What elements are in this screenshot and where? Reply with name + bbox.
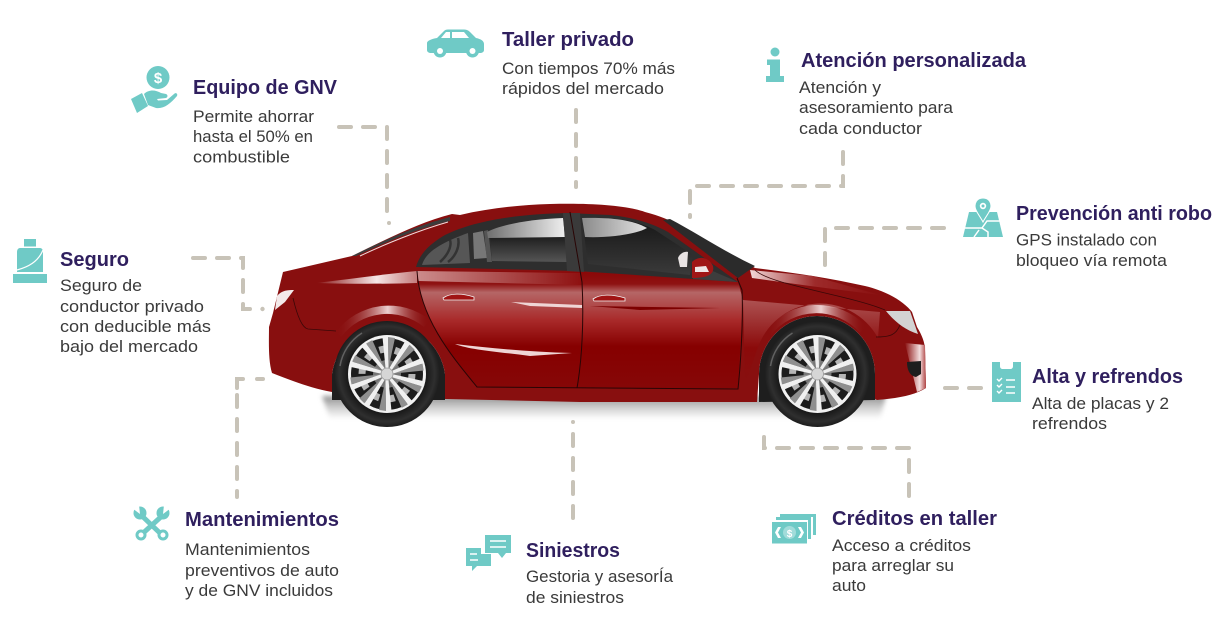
text block bbox=[193, 108, 315, 166]
text block: refrendos bbox=[1032, 415, 1107, 433]
connector: prevencion anti robo bbox=[825, 228, 944, 265]
panel: mantenimientos bbox=[132, 505, 339, 600]
icon: car bbox=[427, 30, 484, 58]
text block: Mantenimientos bbox=[185, 541, 310, 559]
trunk line bbox=[293, 270, 900, 337]
door lines bbox=[417, 212, 742, 389]
icon: banknotes bbox=[772, 514, 816, 544]
text block: cada conductor bbox=[799, 120, 923, 138]
panel: prevencion anti robo bbox=[963, 198, 1212, 270]
rear arch highlight bbox=[336, 306, 430, 337]
front window shine bbox=[582, 218, 647, 237]
connector: mantenimientos bbox=[237, 379, 263, 497]
text block: GPS instalado con bbox=[1016, 232, 1157, 250]
door handle rear bbox=[443, 294, 474, 300]
connector: taller privado bbox=[574, 110, 578, 187]
door shine streaks bbox=[455, 302, 582, 356]
text block: Acceso a créditos bbox=[832, 537, 971, 555]
door pillar bbox=[563, 213, 584, 272]
icon: hand with coin bbox=[131, 66, 177, 113]
icon: clipboard checklist bbox=[992, 362, 1021, 402]
roof edge rear glass trim bbox=[352, 217, 450, 256]
car illustration bbox=[269, 204, 926, 427]
text block bbox=[799, 79, 954, 138]
hood highlight bbox=[750, 270, 880, 295]
heading: Atención personalizada bbox=[801, 50, 1027, 72]
text block: para arreglar su bbox=[832, 557, 954, 575]
panel: atencion personalizada bbox=[766, 48, 1027, 138]
heading: Créditos en taller bbox=[832, 508, 997, 530]
heading: Alta y refrendos bbox=[1032, 366, 1183, 388]
inner mirror bbox=[678, 252, 688, 267]
rear door top band bbox=[417, 271, 582, 285]
text block bbox=[1032, 395, 1169, 433]
icon: info bbox=[766, 48, 784, 82]
front arch highlight bbox=[766, 305, 866, 335]
text block: bajo del mercado bbox=[60, 338, 198, 356]
wheel wells bbox=[332, 316, 875, 402]
mirror highlight bbox=[695, 266, 709, 272]
text block: hasta el 50% en bbox=[193, 128, 313, 146]
panel: siniestros bbox=[466, 535, 674, 607]
fog lamp bbox=[907, 361, 921, 377]
rear wheel bbox=[334, 321, 440, 427]
text block: conductor privado bbox=[60, 298, 204, 316]
icon: banknotes: $ bbox=[787, 529, 793, 540]
text block: de siniestros bbox=[526, 589, 624, 607]
lower mirror triangle bbox=[692, 262, 738, 282]
rear door glass lower bbox=[490, 237, 567, 262]
text block: con deducible más bbox=[60, 318, 211, 336]
rear quarter window bbox=[422, 233, 470, 265]
panel: seguro bbox=[13, 239, 211, 356]
heading: Seguro bbox=[60, 249, 129, 271]
text block: Permite ahorrar bbox=[193, 108, 315, 126]
ground shadow bbox=[322, 396, 886, 419]
text block bbox=[60, 277, 211, 356]
text block: y de GNV incluidos bbox=[185, 582, 333, 600]
front fender shading bbox=[743, 300, 880, 385]
quarter side panel bbox=[473, 231, 487, 259]
quarter window dark arcs bbox=[440, 238, 459, 262]
heading: Equipo de GNV bbox=[193, 77, 338, 99]
text block: preventivos de auto bbox=[185, 562, 339, 580]
text block bbox=[1016, 232, 1168, 270]
icon: crossed wrenches bbox=[132, 505, 171, 539]
front wheel bbox=[764, 321, 870, 427]
panel: equipo de GNV bbox=[131, 66, 338, 166]
windshield bbox=[663, 219, 755, 278]
text block: asesoramiento para bbox=[799, 99, 954, 117]
door handle front bbox=[593, 295, 625, 301]
heading: Mantenimientos bbox=[185, 509, 339, 531]
panel: creditos en taller bbox=[772, 508, 997, 595]
text block: Con tiempos 70% más bbox=[502, 60, 675, 78]
text block: bloqueo vía remota bbox=[1016, 252, 1168, 270]
rear pillar bbox=[484, 230, 492, 262]
rear fender streak bbox=[316, 271, 417, 284]
connector: atencion personalizada bbox=[690, 152, 843, 217]
icon: map pin bbox=[963, 198, 1003, 237]
window frame bbox=[416, 213, 738, 282]
text block bbox=[185, 541, 339, 600]
car body bbox=[269, 204, 926, 402]
panel: alta y refrendos bbox=[992, 362, 1183, 433]
text block bbox=[526, 567, 674, 607]
text block bbox=[832, 537, 971, 595]
text block: rápidos del mercado bbox=[502, 80, 664, 98]
text block: Atención y bbox=[799, 79, 882, 97]
connector: creditos en taller bbox=[764, 437, 909, 496]
roof edge white streak bbox=[360, 222, 448, 256]
front door window bbox=[582, 218, 693, 275]
door panels bbox=[417, 271, 743, 388]
connector: equipo de GNV bbox=[339, 127, 391, 225]
icon: chat bubbles bbox=[466, 535, 511, 571]
text block bbox=[502, 60, 675, 98]
connector: seguro bbox=[193, 258, 265, 311]
text block: Gestoria y asesorÍa bbox=[526, 567, 674, 586]
rear door glass shine bbox=[487, 218, 565, 238]
heading: Taller privado bbox=[502, 29, 634, 51]
text block: Seguro de bbox=[60, 277, 142, 295]
text block: combustible bbox=[193, 148, 290, 166]
connector: siniestros bbox=[571, 420, 575, 518]
connector: alta y refrendos bbox=[945, 386, 981, 390]
text block: auto bbox=[832, 577, 866, 595]
icon: hand with coin: $ bbox=[154, 70, 163, 87]
side mirror bbox=[692, 258, 713, 278]
text block: Alta de placas y 2 bbox=[1032, 395, 1169, 413]
icon: seat bbox=[13, 239, 47, 283]
bumper highlight bbox=[905, 343, 926, 392]
heading: Siniestros bbox=[526, 540, 620, 562]
taillight bbox=[275, 290, 294, 310]
panel: taller privado bbox=[427, 29, 675, 98]
headlight bbox=[886, 311, 918, 334]
heading: Prevención anti robo bbox=[1016, 203, 1212, 225]
